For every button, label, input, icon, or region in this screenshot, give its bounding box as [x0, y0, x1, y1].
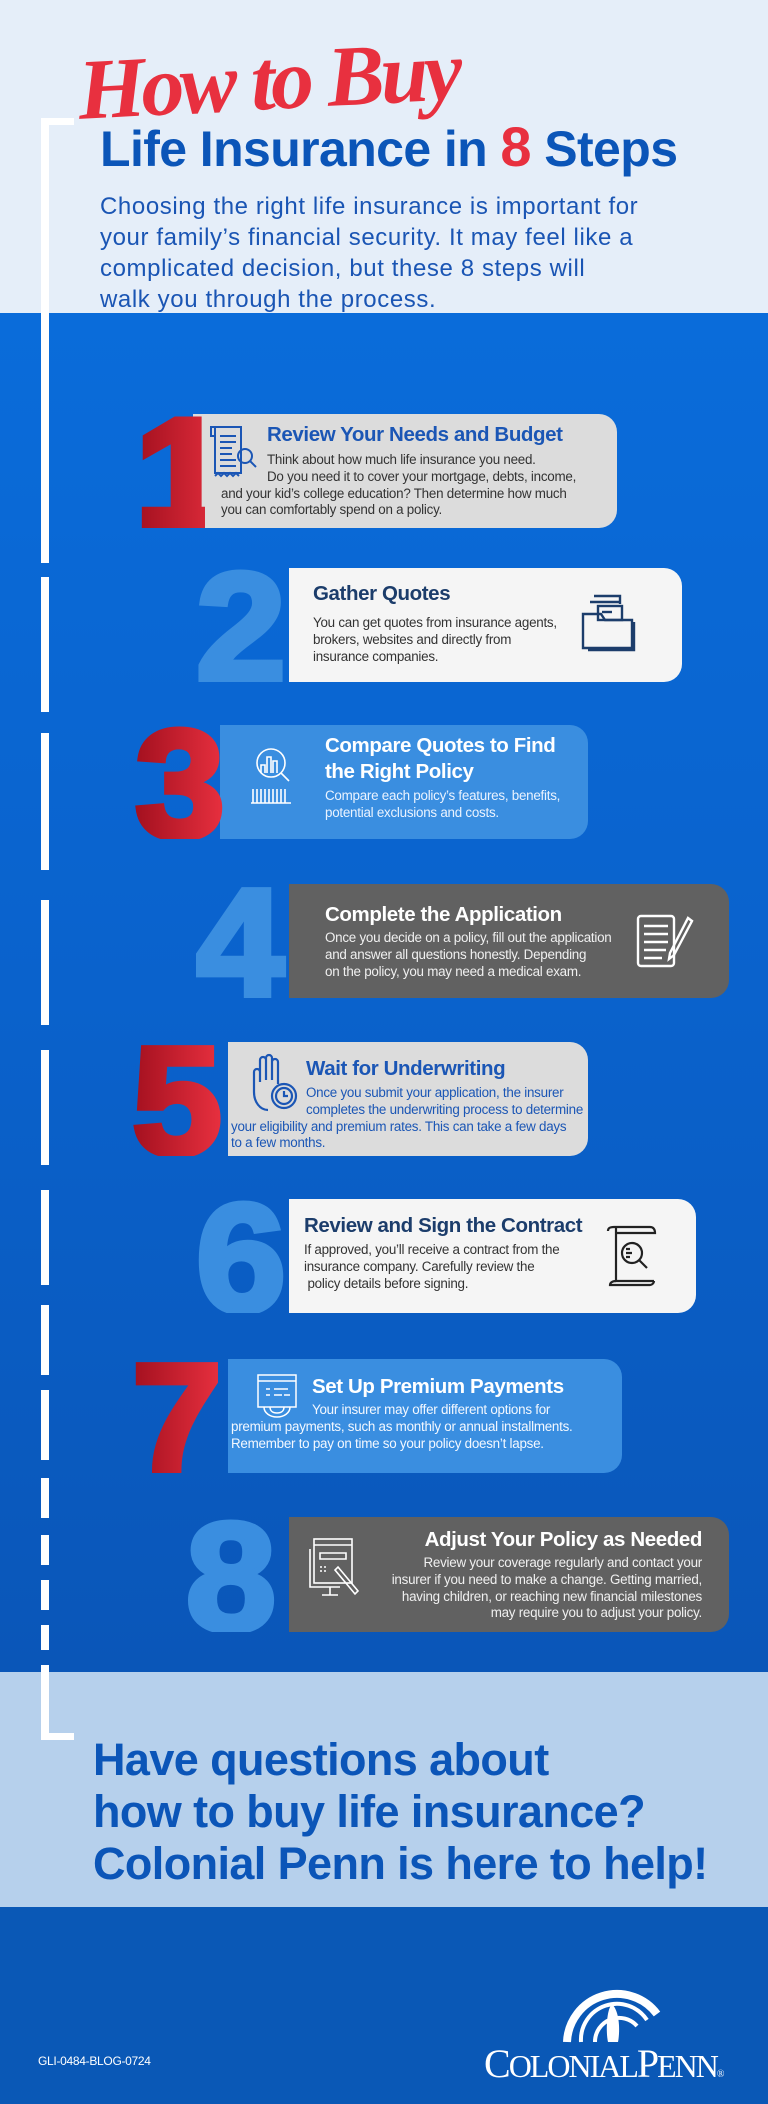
card 7	[228, 1359, 622, 1473]
card 2	[289, 568, 682, 682]
step 1: you can comfortably spend on a policy.	[221, 502, 442, 517]
title: Life Insurance in 8 Steps: Life Insurance in 8 Steps	[100, 115, 677, 178]
card 5	[228, 1042, 588, 1156]
body 4: Once you decide on a policy, fill out the application	[325, 930, 612, 945]
step 8	[186, 1517, 729, 1632]
intro paragraph: complicated decision, but these 8 steps will	[100, 255, 585, 282]
title 5: Wait for Underwriting	[306, 1057, 505, 1080]
body 4	[325, 930, 612, 979]
step 5	[132, 1042, 588, 1156]
step 5: to a few months.	[231, 1135, 325, 1150]
step 5: your eligibility and premium rates. This can take a few days	[231, 1119, 566, 1134]
icon: form with pen	[636, 914, 694, 968]
step 7: Remember to pay on time so your policy doesn’t lapse.	[231, 1436, 544, 1451]
step 3	[135, 725, 588, 839]
call-to-action panel	[0, 1672, 768, 1907]
body 1: Think about how much life insurance you need.	[267, 452, 536, 467]
body 2	[313, 615, 557, 664]
title 8: Adjust Your Policy as Needed	[425, 1528, 702, 1551]
intro paragraph: walk you through the process.	[100, 286, 436, 313]
body 7: Your insurer may offer different options for	[312, 1402, 550, 1417]
step 1: and your kid’s college education? Then determine how much	[221, 486, 567, 501]
body 3: potential exclusions and costs.	[325, 805, 499, 820]
body 1	[267, 452, 576, 484]
body 5: Once you submit your application, the insurer	[306, 1085, 563, 1100]
body 4: on the policy, you may need a medical exam.	[325, 964, 581, 979]
body 8: Review your coverage regularly and contact your	[423, 1555, 702, 1570]
logo wordmark: COLONIALPENN®	[484, 2041, 722, 2086]
icon: hand with clock	[252, 1054, 298, 1112]
icon: folder	[582, 594, 636, 652]
timeline end tick	[41, 1672, 74, 1740]
call-to-action text	[93, 1734, 708, 1889]
body 6: insurance company. Carefully review the	[304, 1259, 534, 1274]
step 2	[196, 568, 682, 682]
title 1: Review Your Needs and Budget	[267, 423, 563, 446]
card 3	[220, 725, 588, 839]
title 2: Gather Quotes	[313, 582, 450, 605]
body 2: insurance companies.	[313, 649, 438, 664]
header background	[0, 0, 768, 313]
intro paragraph	[100, 193, 638, 313]
body 1: Do you need it to cover your mortgage, debts, income,	[267, 469, 576, 484]
intro paragraph: your family’s financial security. It may feel like a	[100, 224, 633, 251]
logo: Colonial Penn	[484, 1990, 724, 2086]
body 8: having children, or reaching new financial milestones	[402, 1589, 702, 1604]
title 6: Review and Sign the Contract	[304, 1214, 582, 1237]
icon: document with magnifier	[210, 426, 257, 478]
icon: monitor with pen	[309, 1538, 359, 1596]
body 8: may require you to adjust your policy.	[491, 1605, 702, 1620]
icon: chart with magnifier	[251, 748, 291, 804]
footer code: GLI-0484-BLOG-0724	[38, 2054, 151, 2068]
title 4: Complete the Application	[325, 903, 562, 926]
body 8: insurer if you need to make a change. Getting married,	[392, 1572, 702, 1587]
timeline line	[41, 118, 74, 1650]
body 5	[306, 1085, 583, 1117]
step 7	[132, 1359, 622, 1473]
footer	[0, 1907, 768, 2104]
step 7: premium payments, such as monthly or annual installments.	[231, 1419, 573, 1434]
call-to-action text: how to buy life insurance?	[93, 1786, 645, 1837]
logo arch	[563, 1990, 660, 2042]
title 7: Set Up Premium Payments	[312, 1375, 564, 1398]
call-to-action text: Have questions about	[93, 1734, 549, 1785]
step 6	[196, 1199, 696, 1313]
title 3: the Right Policy	[325, 760, 474, 783]
body 8	[392, 1555, 702, 1620]
icon: payment screen with gear	[257, 1374, 297, 1418]
title: How to Buy: How to Buy	[76, 22, 461, 138]
step 4	[196, 884, 729, 998]
step 1	[135, 414, 617, 528]
intro paragraph: Choosing the right life insurance is important for	[100, 193, 638, 220]
title 3	[325, 734, 555, 783]
body 6: If approved, you’ll receive a contract from the	[304, 1242, 559, 1257]
body 2: brokers, websites and directly from	[313, 632, 511, 647]
body 6: policy details before signing.	[307, 1276, 468, 1291]
body 4: and answer all questions honestly. Depending	[325, 947, 586, 962]
main blue background	[0, 313, 768, 1672]
title 3: Compare Quotes to Find	[325, 734, 555, 757]
card 4	[289, 884, 729, 998]
call-to-action text: Colonial Penn is here to help!	[93, 1838, 708, 1889]
body 3: Compare each policy’s features, benefits,	[325, 788, 560, 803]
body 3	[325, 788, 560, 820]
card 1	[193, 414, 617, 528]
card 8	[289, 1517, 729, 1632]
card 6	[289, 1199, 696, 1313]
body 6	[304, 1242, 560, 1291]
body 2: You can get quotes from insurance agents,	[313, 615, 557, 630]
body 5: completes the underwriting process to determine	[306, 1102, 583, 1117]
icon: scroll with magnifier	[606, 1226, 656, 1286]
